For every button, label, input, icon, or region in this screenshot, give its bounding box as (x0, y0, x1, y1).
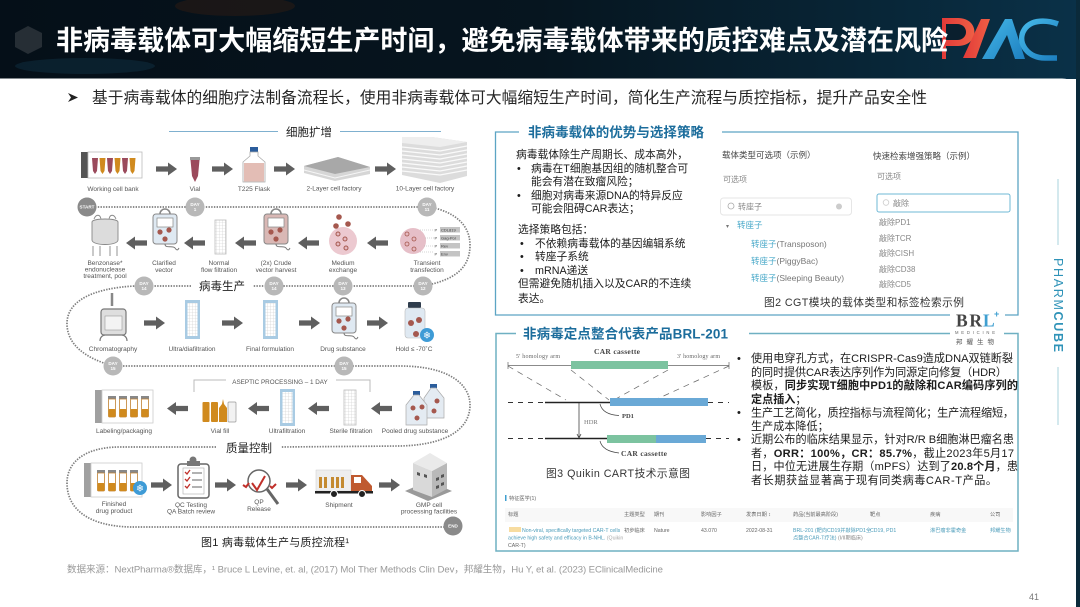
text block: risks: 病毒载体除生产周期长、成本高外， (516, 148, 688, 161)
table: clinical literature (505, 494, 1013, 549)
badge: day 11: 11 (425, 207, 430, 212)
text block: product highlights: 定点插入； (751, 392, 806, 406)
badge: day 12 (414, 276, 432, 296)
label: vial: Vial (190, 186, 201, 193)
text block: product highlights: 生产工艺简化，质控指标与流程简化；生产流程缩短， (751, 406, 1014, 420)
badge: day 11: DAY (422, 202, 432, 207)
label: transient transfection (410, 260, 444, 274)
icon: transient transfection: Rev (441, 244, 448, 248)
diagram: Quikin CART: 3' homology arm (677, 354, 720, 360)
source note: 数据来源：NextPharma®数据库，¹ Bruce L Levine, et. al, (2017) Mol Ther Methods Clin Dev，邦耀生物，Hu Y, et al. (2023) EClinicalMedicine (67, 564, 663, 576)
caption: figure 2: 图2 CGT模块的载体类型和标签检索示例 (764, 296, 964, 309)
label: normal flow filtration: flow filtration (201, 267, 237, 274)
icon: transient transfection: CDL819 (441, 228, 456, 232)
text block: product highlights (737, 351, 1018, 487)
arrow (156, 162, 177, 176)
table row: 43.070 (701, 528, 717, 534)
label: transient transfection: Transient (414, 260, 441, 267)
table row: Non-viral, specifically targeted CAR-T cells (522, 528, 621, 534)
label: medium exchange (329, 260, 357, 274)
icon: GMP building (405, 453, 452, 501)
badge: day 15 (104, 356, 122, 376)
badge: day 14 (134, 276, 154, 296)
option tree: 转座子(Sleeping Beauty) (751, 273, 844, 283)
text block: product highlights: 模板，同步实现T细胞中PD1的敲除和CAR编码序列的 (751, 378, 1018, 392)
screenshot: quick search: 可选项 (877, 171, 901, 181)
label: benzonase (83, 260, 127, 280)
option tree: 转座子(PiggyBac) (751, 256, 818, 266)
text block: strategies: 选择策略包括： (518, 223, 593, 236)
badge: day 11 (418, 198, 436, 216)
tag list: 敲除CD5 (879, 279, 912, 289)
screenshot: vector type options: 载体类型可选项（示例） (722, 150, 816, 160)
text block: product highlights: 日，中位无进展生存期（mPFS）达到了20.8个月，患 (751, 459, 1018, 473)
label: QP release: Release (247, 506, 271, 513)
icon: transient transfection: P (434, 252, 438, 256)
tag list: 敲除CD38 (879, 264, 916, 274)
heading: cell expansion: 细胞扩增 (286, 125, 332, 139)
caption: figure 1: 图1 病毒载体生产与质控流程¹ (201, 535, 349, 549)
text block: strategies: 不依赖病毒载体的基因编辑系统 (535, 237, 686, 250)
arrow (298, 236, 319, 250)
text block: strategies: mRNA递送 (535, 264, 588, 277)
badge: day 15 (334, 356, 354, 376)
icon: transient transfection (400, 227, 460, 256)
arrow (371, 402, 392, 415)
table header: 发表日期 ↕ (746, 510, 771, 518)
icon: frozen bottle: ❄ (423, 330, 431, 342)
text block: product highlights: • (737, 434, 741, 446)
text block: risks: 病毒在T细胞基因组的随机整合可 (531, 162, 688, 175)
text block: product highlights: 者，ORR：100%，CR：85.7%，截止2023年5月17 (751, 446, 1014, 460)
badge: day 12: DAY (418, 281, 428, 286)
text block: product highlights: 使用电穿孔方式，在CRISPR-Cas9造成DNA双链断裂 (751, 351, 1013, 365)
caption: figure 3: 图3 Quikin CART技术示意图 (546, 467, 690, 480)
arrow (308, 402, 329, 415)
label: QC testing: QA Batch review (167, 508, 215, 516)
label: 10-layer cell factory: 10-Layer cell factory (396, 186, 455, 192)
icon: 10-layer cell factory (402, 137, 467, 183)
diagram: Quikin CART: CAR cassette (621, 449, 668, 458)
icon: working cell bank (81, 152, 142, 178)
table header: 标题 (508, 510, 518, 518)
arrow (379, 478, 400, 492)
text block: product highlights: • (737, 353, 741, 365)
text block: risks: • (517, 163, 521, 175)
arrow (274, 162, 295, 176)
icon: crude vector bag (264, 209, 290, 250)
table row: 2022-08-31 (746, 528, 773, 534)
icon: pooled bottles (406, 384, 444, 425)
text block: strategies: 表达。 (518, 292, 550, 305)
tag list: 敲除CISH (879, 248, 914, 258)
option tree (726, 220, 844, 283)
label: 2-layer cell factory: 2-Layer cell factory (307, 186, 362, 192)
label: clarified vector: Clarified (152, 260, 176, 267)
label: T225 flask: T225 Flask (238, 186, 271, 193)
diagram: Quikin CART: HDR (584, 419, 598, 426)
badge: day 15: DAY (108, 361, 118, 366)
label: GMP facilities: GMP cell (416, 502, 443, 509)
arrow (222, 316, 243, 330)
label: clarified vector: vector (155, 267, 174, 274)
label: clarified vector (152, 260, 176, 274)
icon: finished drug product (84, 463, 147, 497)
subtitle bullet: 基于病毒载体的细胞疗法制备流程长，使用非病毒载体可大幅缩短生产时间，简化生产流程与质控指标，提升产品安全性 (92, 89, 927, 107)
table row: 淋巴瘤非霍奇金 (930, 526, 967, 534)
tag list: 敲除TCR (879, 233, 912, 243)
label: sterile filtration: Sterile filtration (330, 428, 373, 435)
badge: day 14: 14 (141, 286, 147, 291)
label: benzonase: treatment, pool (83, 273, 127, 280)
text block: strategies (518, 223, 691, 305)
label: finished drug product (96, 501, 132, 515)
text block: risks: 能会有潜在致瘤风险； (531, 175, 639, 188)
text block: product highlights: • (737, 407, 741, 419)
icon: drug substance bag (332, 298, 358, 339)
table row: 点整合CAR-T疗法) (I/II期临床) (793, 534, 863, 542)
screenshot: vector type options (720, 150, 852, 283)
arrow (144, 316, 165, 330)
badge: day 1: 1 (194, 207, 197, 212)
table row: 初步临床 (624, 526, 646, 534)
icon: T225 flask (243, 147, 265, 182)
heading: 非病毒载体的优势与选择策略 (528, 124, 704, 140)
icon: benzonase tank (92, 215, 118, 256)
badge: day 14: 14 (271, 286, 277, 291)
table row: BRL-201 (靶向CD19并敲除PD1全 (793, 526, 872, 534)
arrow (184, 236, 205, 250)
label: QC testing (167, 502, 215, 516)
icon: labeling/packaging (95, 390, 153, 423)
table row (508, 526, 1011, 549)
table header: 公司 (990, 511, 1000, 518)
text block: strategies: • (520, 251, 524, 263)
badge: START (78, 198, 96, 216)
badge: day 14 (264, 276, 284, 296)
badge: day 13: 13 (340, 286, 346, 291)
label: shipment: Shipment (325, 502, 353, 509)
table header: 期刊 (654, 510, 664, 518)
icon: shipment truck (315, 470, 373, 498)
diagram: Quikin CART: PD1 (622, 413, 634, 420)
icon: final formulation cassette (263, 300, 278, 339)
arrow (151, 478, 172, 492)
label: normal flow filtration (201, 260, 237, 274)
right edge strip (1076, 0, 1080, 607)
icon: chromatography (100, 293, 127, 341)
arrow (235, 236, 256, 250)
side brand: PharmCube: PHARM CUBE (1051, 258, 1065, 352)
arrow (215, 478, 236, 492)
logo: BRL Medicine: MEDICINE (955, 330, 995, 335)
tag list (879, 217, 916, 289)
header band (0, 0, 1080, 79)
arrow (126, 236, 147, 250)
table row: 邦耀生物 (990, 526, 1011, 534)
panel: viral vector production flow (67, 125, 470, 549)
table row: achieve high safety and efficacy in B-NHL. (Quikin (508, 536, 623, 542)
label: pooled drug substance: Pooled drug substance (382, 428, 449, 435)
label: vial fill: Vial fill (211, 428, 230, 435)
badge: START: START (80, 204, 95, 210)
option tree: ▾ (726, 224, 729, 230)
table row: Nature (654, 528, 670, 534)
label: ultra/diafiltration: Ultra/diafiltration (169, 346, 216, 353)
icon: clarified vector bag (153, 209, 179, 250)
text block: strategies: 但需避免随机插入以及CAR的不连续 (518, 277, 691, 290)
icon: flow filter (215, 220, 226, 254)
text block: strategies: • (520, 265, 524, 277)
arrow (248, 402, 269, 415)
icon: transient transfection: P (434, 244, 438, 248)
icon: QP release magnifier (243, 470, 278, 504)
text block: product highlights: 近期公布的临床结果显示，针对R/R B细胞淋巴瘤名患 (751, 432, 1014, 446)
arrow (167, 402, 188, 415)
text block: product highlights: 生产成本降低； (751, 419, 829, 433)
arrow (286, 478, 307, 492)
label: crude vector harvest (256, 260, 297, 274)
icon: finished drug product: ❄ (136, 484, 144, 494)
arrow (367, 316, 388, 330)
table header: 主题类型 (624, 510, 645, 518)
label: hold: Hold ≤ -70˚C (396, 345, 433, 353)
badge: day 14: DAY (139, 281, 149, 286)
badge: day 15: 15 (341, 366, 347, 371)
screenshot: quick search: 快速检索增强策略（示例） (873, 151, 975, 161)
badge: day 12: 12 (420, 286, 426, 291)
arrow (299, 316, 320, 330)
badge: END (444, 516, 462, 536)
badge: day 13 (334, 276, 352, 296)
label: finished drug product: drug product (96, 508, 132, 515)
icon: transient transfection: P (434, 228, 438, 232)
option tree: 转座子(Transposon) (751, 239, 827, 249)
icon: vial (190, 157, 200, 182)
badge: day 1 (186, 198, 204, 216)
icon: vial fill (202, 399, 236, 422)
logo: BRL Medicine: 邦耀生物 (956, 337, 994, 346)
label: GMP facilities: processing facilities (401, 508, 458, 516)
badge: END: END (448, 524, 459, 528)
text block: strategies: • (520, 238, 524, 250)
page number: 41 (1029, 592, 1039, 602)
table row: CD19, PD1 (870, 528, 896, 534)
label: QC testing: QC Testing (175, 502, 207, 509)
search box: 转座子 (738, 202, 762, 212)
badge: day 15: 15 (110, 366, 116, 371)
label: GMP facilities (401, 502, 458, 516)
panel: advantages and selection strategy (496, 124, 1018, 315)
badge: day 15: DAY (339, 361, 349, 366)
label: medium exchange: exchange (329, 267, 357, 274)
title: 非病毒载体可大幅缩短生产时间，避免病毒载体带来的质控难点及潜在风险 (56, 25, 948, 56)
icon: 2-layer cell factory (304, 157, 370, 181)
label: transient transfection: transfection (410, 267, 444, 274)
badge: day 1: DAY (190, 202, 200, 207)
label: medium exchange: Medium (331, 260, 355, 267)
icon: medium exchange (329, 214, 357, 255)
label: QP release (247, 499, 271, 513)
icon: sterile filter (344, 390, 356, 425)
table header: 影响因子 (701, 510, 722, 518)
bracket: aseptic processing (194, 379, 370, 392)
label: QP release: QP (254, 499, 264, 506)
arrow (375, 162, 396, 176)
text block: risks: 细胞对病毒来源DNA的特异反应 (531, 189, 683, 202)
search box: 敲除 (893, 198, 909, 208)
label: finished drug product: Finished (102, 501, 127, 508)
icon: ultrafiltration cassette (280, 389, 295, 426)
text block: risks (516, 148, 688, 215)
table header (508, 510, 1000, 518)
label: crude vector harvest: vector harvest (256, 267, 297, 274)
table: clinical literature: 特征医学(1) (509, 494, 536, 502)
diagram: Quikin CART (508, 347, 729, 458)
arrow (367, 236, 388, 250)
badge: day 13: DAY (338, 281, 348, 286)
logo: BRL Medicine: + (994, 309, 999, 319)
logo: PIAC (942, 18, 1058, 59)
label: labeling/packaging: Labeling/packaging (96, 428, 152, 435)
dotted process path (67, 207, 470, 527)
label: benzonase: Benzonase* (87, 260, 123, 267)
icon: transient transfection: Gag-Pol (441, 236, 456, 240)
label: chromatography: Chromatography (89, 346, 138, 353)
text block: strategies: 转座子系统 (535, 250, 589, 263)
logo: BRL Medicine: L (983, 310, 995, 330)
screenshot: quick search (873, 151, 1010, 289)
label: drug substance: Drug substance (320, 346, 366, 353)
bracket: aseptic processing: ASEPTIC PROCESSING – 1 DAY (232, 379, 329, 386)
logo: BRL Medicine: BR (956, 310, 982, 330)
label: ultrafiltration: Ultrafiltration (269, 428, 306, 435)
heading: virus production: 病毒生产 (199, 279, 245, 293)
diagram: Quikin CART: CAR cassette (594, 347, 641, 356)
diagram: Quikin CART: 5' homology arm (516, 354, 560, 360)
label: working cell bank: Working cell bank (87, 186, 139, 193)
icon: ultra/diafiltration cassette (185, 300, 200, 339)
icon: transient transfection: Env (441, 252, 448, 256)
tag list: 敲除PD1 (879, 217, 911, 227)
text block: risks: • (517, 190, 521, 202)
label: normal flow filtration: Normal (209, 260, 230, 267)
label: benzonase: endonuclease (85, 266, 126, 274)
text block: risks: 可能会阻碍CAR表达； (531, 202, 640, 215)
label: final formulation: Final formulation (246, 346, 294, 353)
icon: QC clipboard (178, 456, 209, 498)
arrow (212, 162, 233, 176)
screenshot: vector type options: 可选项 (723, 174, 747, 184)
text block: product highlights: 的同时提供CAR表达序列作为同源定向修复（HDR） (751, 365, 1007, 379)
text block: product highlights: 者长期获益显著高于现有同类病毒CAR-T产品。 (751, 473, 997, 487)
option tree: 转座子 (737, 220, 763, 230)
logo: BRL Medicine (955, 309, 999, 346)
heading: quality control: 质量控制 (226, 441, 272, 455)
table header: 药品(当前最高阶段) (793, 510, 838, 518)
table row: CAR-T) (508, 543, 526, 549)
panel: BRL-201 (496, 326, 1018, 551)
table header: 疾病 (930, 510, 940, 518)
icon: frozen bottle (405, 302, 434, 342)
icon: transient transfection: P (434, 236, 438, 240)
label: crude vector harvest: (2x) Crude (261, 260, 292, 267)
table header: 靶点 (870, 510, 880, 518)
heading: 非病毒定点整合代表产品BRL-201 (523, 326, 728, 342)
badge: day 14: DAY (269, 281, 279, 286)
